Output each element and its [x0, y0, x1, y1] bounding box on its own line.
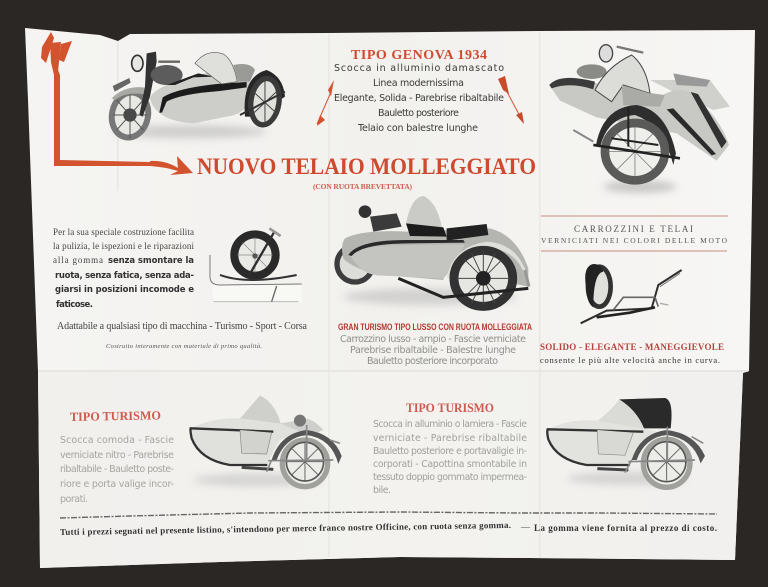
text: adaptable line: Adattabile a qualsiasi tipo di macchina - Turismo - Sport - Corsa — [57, 321, 308, 332]
main heading: nuovo telaio molleggiato: NUOVO TELAIO MOLLEGGIATO — [197, 154, 536, 180]
illustration: tipo turismo sidecar, left — [190, 395, 342, 487]
text block: frame description: Per la sua speciale costruzione facilita — [53, 227, 194, 237]
illustration: motorcycle with sidecar, top left — [108, 52, 285, 141]
text block: solido elegante maneggievole: SOLIDO - ELEGANTE - MANEGGIEVOLE — [540, 342, 724, 352]
footer: price note: Tutti i prezzi segnati nel presente listino, s'intendono per merce franco nostre Officine, con ruota senza gomma. — [60, 520, 511, 537]
description: tipo turismo right: verniciate - Parebrise ribaltabile — [373, 433, 527, 444]
text block: carrozzini e telai — [541, 216, 728, 251]
description: gran turismo: Carrozzino lusso - ampio - Fascie verniciate — [340, 334, 526, 345]
description: gran turismo: Bauletto posteriore incorporato — [367, 356, 498, 367]
description: tipo turismo right: Scocca in alluminio o lamiera - Fascie — [373, 419, 527, 430]
text block: solido elegante maneggievole — [540, 342, 724, 365]
list: genova features — [334, 63, 504, 134]
description: tipo turismo left — [60, 435, 174, 505]
subheading: patent note: (CON RUOTA BREVETTATA) — [313, 182, 412, 191]
description: tipo turismo right: bile. — [373, 485, 391, 496]
text block: tipo turismo left — [60, 408, 174, 505]
description: tipo turismo right — [373, 419, 527, 496]
list: genova features: Telaio con balestre lunghe — [357, 123, 478, 134]
text block: frame description: ruota, senza fatica, senza ada- — [55, 271, 194, 281]
text block: frame description: senza smontare la — [108, 256, 194, 266]
text: materials note: Costruito interamente con materiale di primo qualità. — [106, 343, 262, 350]
description: gran turismo: Parebrise ribaltabile - Balestre lunghe — [350, 345, 516, 356]
title: tipo genova: TIPO GENOVA 1934 — [351, 48, 487, 63]
text block: solido elegante maneggievole: consente le più alte velocità anche in curva. — [540, 355, 720, 365]
heading: tipo turismo right: TIPO TURISMO — [406, 401, 494, 415]
list: genova features: Linea modernissima — [373, 78, 464, 89]
description: tipo turismo left: riore e porta valige incor- — [60, 479, 174, 490]
heading: gran turismo: GRAN TURISMO TIPO LUSSO CON RUOTA MOLLEGGIATA — [338, 322, 532, 332]
description: tipo turismo left: ribaltabile - Bauletto poste- — [60, 464, 174, 475]
illustration: tipo turismo sidecar with hood, right — [547, 398, 705, 487]
divider: dotted rule — [60, 512, 717, 518]
description: tipo turismo right: tessuto doppio gommato impermea- — [373, 472, 527, 483]
footer: price note: La gomma viene fornita al prezzo di costo. — [534, 523, 717, 533]
description: tipo turismo left: verniciate nitro - Parebrise — [60, 450, 174, 461]
list: genova features: Bauletto posteriore — [378, 108, 459, 119]
illustration: sidecar rear three-quarter view, top right — [549, 45, 730, 193]
illustration: wheel on lifting frame — [210, 228, 302, 302]
large red arrow with feathers — [41, 32, 193, 175]
text block: carrozzini e telai: VERNICIATI NEI COLORI DELLE MOTO — [541, 236, 728, 245]
illustration: sidecar chassis, right — [581, 264, 682, 323]
list: genova features: Scocca in alluminio damascato — [334, 63, 504, 74]
text block: frame description: la pulizia, le ispezioni e le riparazioni — [53, 241, 194, 251]
small red arrow right — [498, 76, 524, 124]
footer: price note: — — [520, 522, 531, 532]
small red arrow left — [317, 80, 334, 126]
text block: tipo turismo right — [373, 401, 527, 496]
text block: carrozzini e telai: CARROZZINI E TELAI — [574, 224, 693, 234]
description: tipo turismo left: Scocca comoda - Fascie — [60, 435, 174, 446]
description: gran turismo — [340, 334, 526, 367]
description: tipo turismo left: porati. — [60, 494, 88, 505]
text block: frame description — [53, 227, 194, 310]
description: tipo turismo right: corporati - Capottina smontabile in — [373, 459, 527, 470]
heading: tipo turismo left: TIPO TURISMO — [70, 408, 161, 424]
text block: gran turismo — [338, 322, 532, 367]
list: genova features: Elegante, Solida - Parebrise ribaltabile — [334, 93, 504, 104]
text block: frame description: giarsi in posizioni incomode e — [55, 285, 194, 295]
text block: frame description: alla gomma — [53, 255, 103, 265]
illustration: gran turismo sidecar, centre — [337, 196, 529, 306]
description: tipo turismo right: Bauletto posteriore e portavaligie in- — [373, 446, 527, 457]
text block: frame description: faticose. — [56, 300, 93, 310]
heading block: tipo genova 1934 — [334, 48, 504, 134]
footer: price note — [60, 520, 717, 537]
